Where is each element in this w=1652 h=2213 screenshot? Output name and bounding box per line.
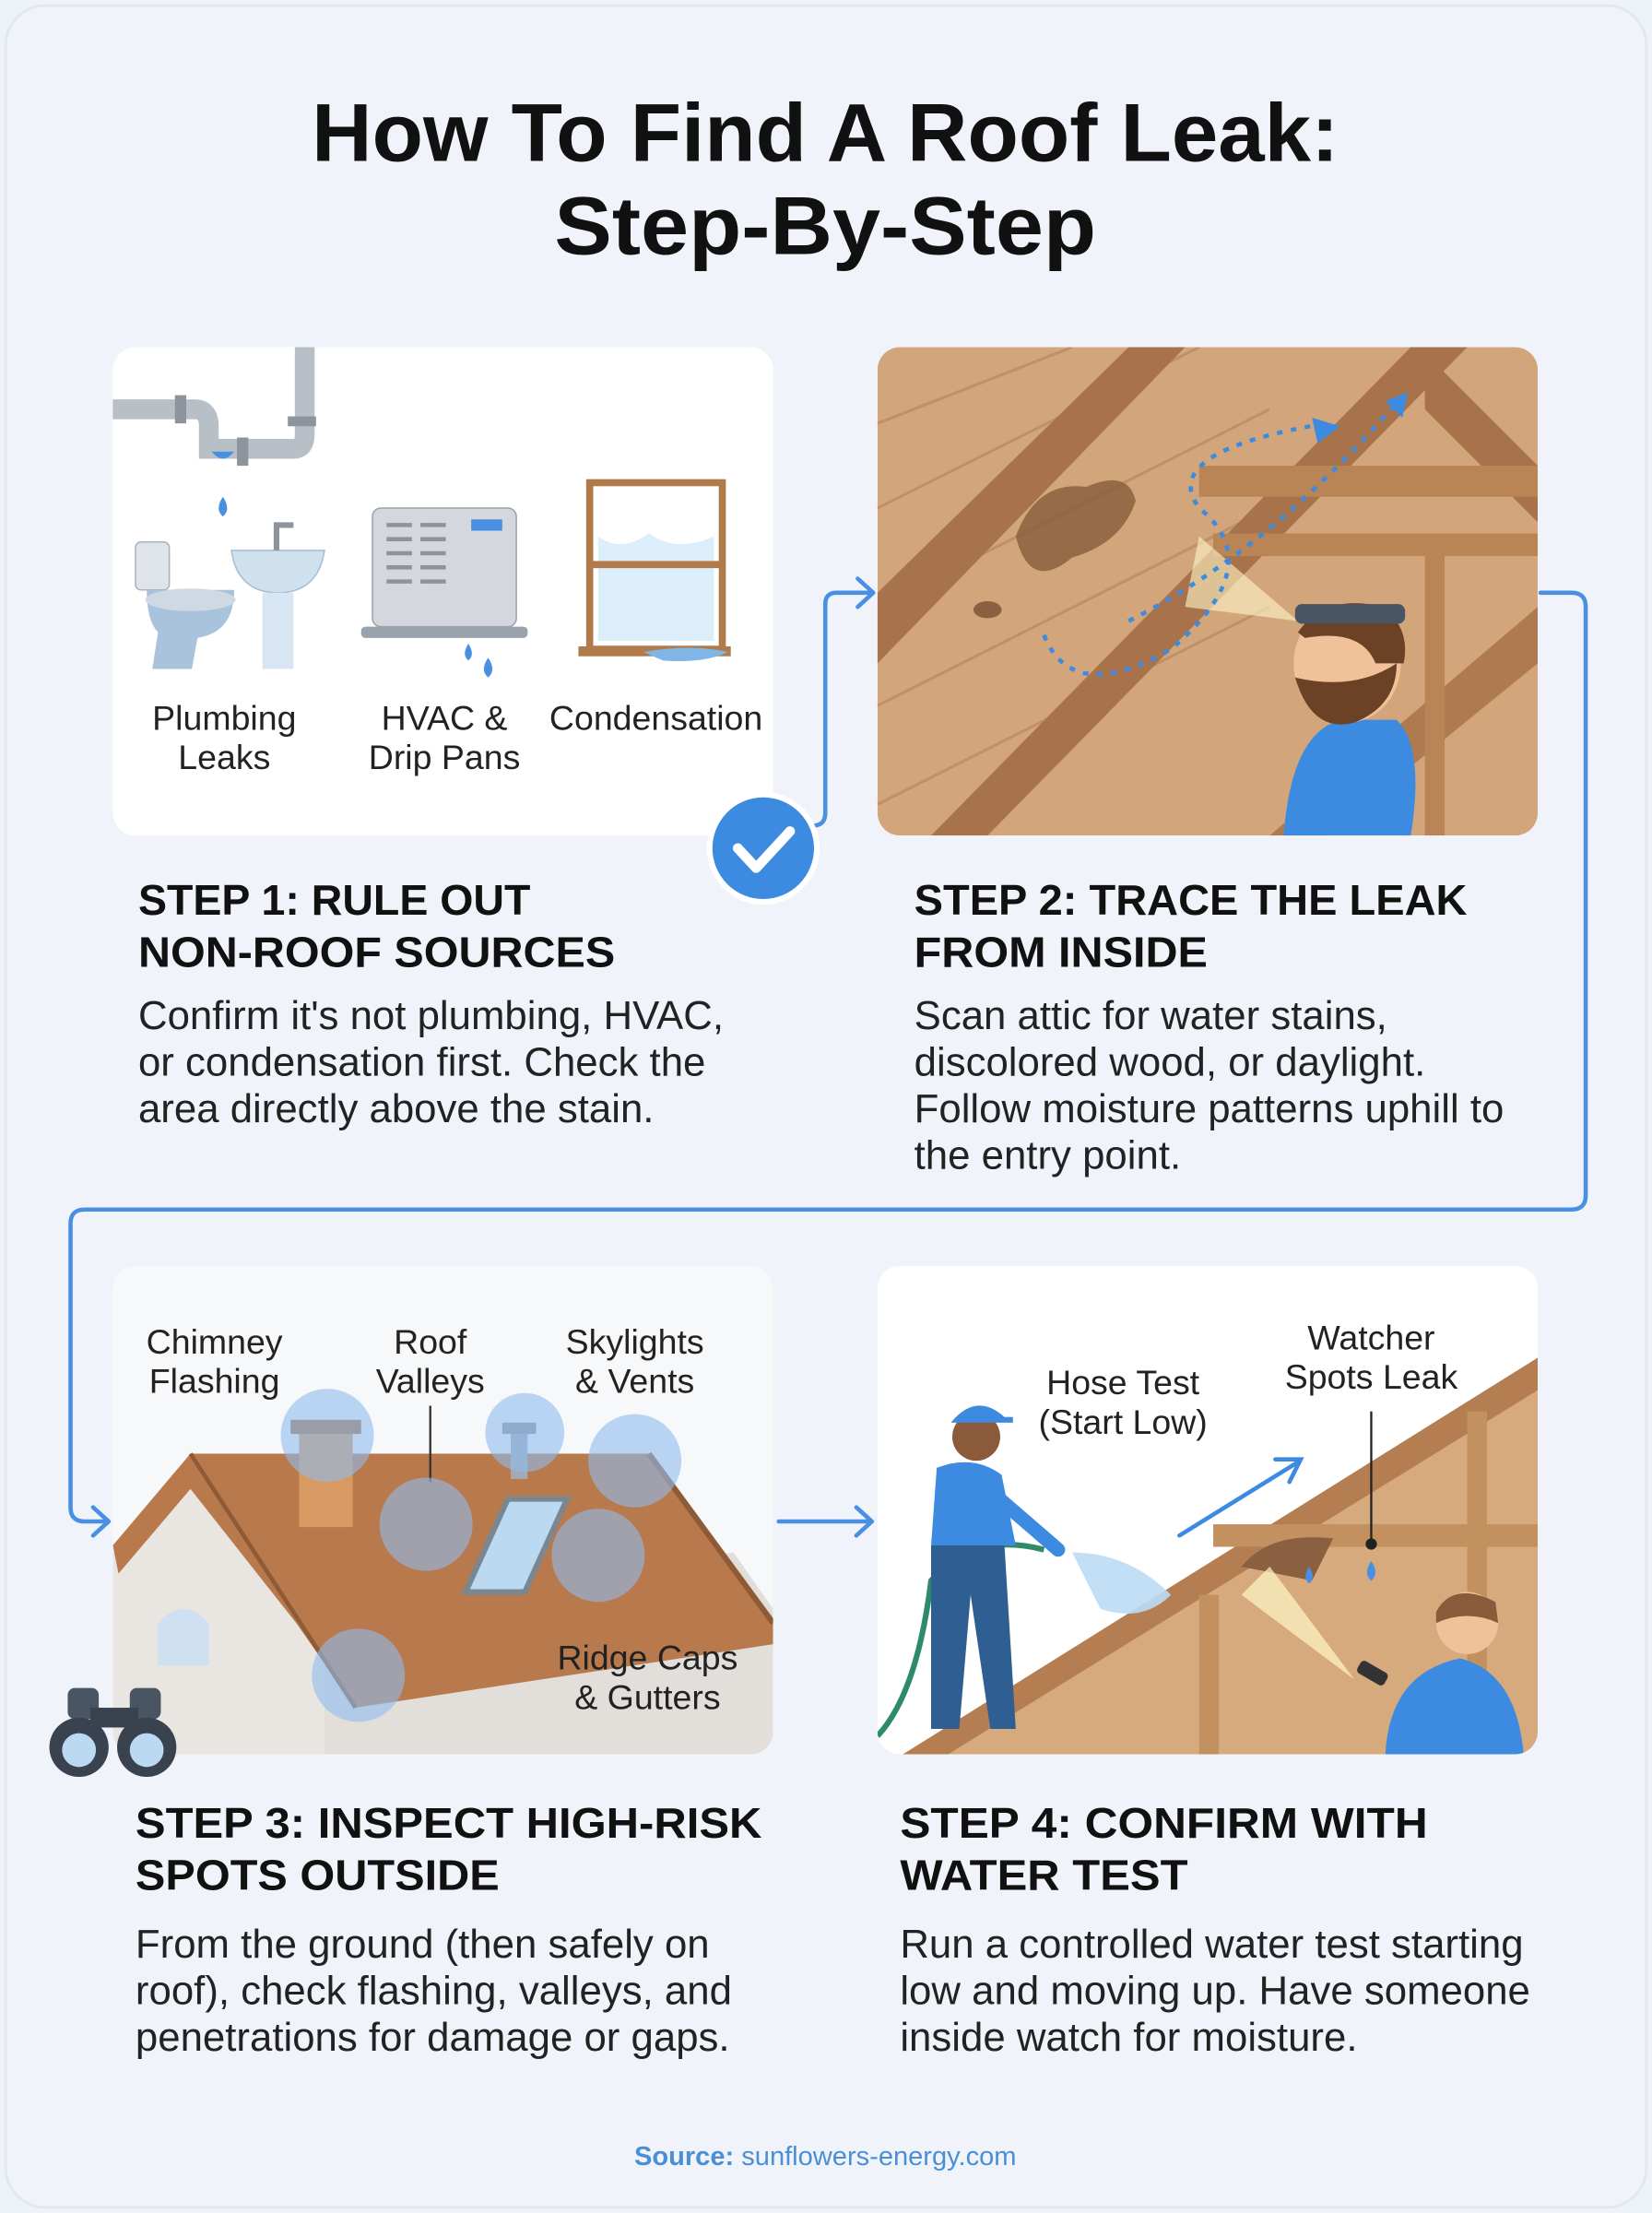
icon: binoculars [50, 1688, 176, 1777]
labels: panel 3: & Gutters [574, 1678, 721, 1717]
title: How To Find A Roof Leak: [312, 87, 1339, 178]
step 2 text: Scan attic for water stains, [914, 993, 1387, 1038]
labels: panel 3: Valleys [376, 1362, 485, 1401]
icon: pipes [112, 348, 316, 516]
step 3 text: roof), check flashing, valleys, and [136, 1968, 732, 2013]
step 3 text: STEP 3: INSPECT HIGH-RISK [136, 1799, 761, 1847]
step 2 text: the entry point. [914, 1132, 1181, 1178]
step 2 text: discolored wood, or daylight. [914, 1039, 1425, 1084]
step 4 text: WATER TEST [900, 1851, 1188, 1899]
step 4 text: STEP 4: CONFIRM WITH [900, 1799, 1428, 1847]
step 3 text: penetrations for damage or gaps. [136, 2015, 730, 2060]
panel 1: non-roof sources [112, 348, 773, 835]
labels: panel 4 [1038, 1318, 1457, 1441]
labels: panel 1: HVAC & [382, 698, 507, 737]
labels: panel 1: Plumbing [152, 698, 296, 737]
panel 2: attic illustration [878, 348, 1538, 835]
worker [931, 1462, 1016, 1545]
step 2 text [914, 876, 1504, 1178]
connector arrows [71, 579, 1586, 1535]
labels: panel 3: Skylights [566, 1322, 704, 1361]
labels: panel 1 [152, 698, 762, 776]
labels: panel 4: (Start Low) [1038, 1402, 1208, 1441]
step 3 text [136, 1799, 761, 2060]
labels: panel 3: & Vents [575, 1362, 694, 1401]
icon: HVAC unit [361, 508, 527, 678]
labels: panel 4: Watcher [1307, 1318, 1435, 1356]
arrow: moving up [1179, 1460, 1301, 1535]
step 1 text: or condensation first. Check the [138, 1039, 705, 1084]
step 3 text: SPOTS OUTSIDE [136, 1851, 500, 1899]
labels: panel 1: Condensation [549, 698, 762, 737]
step 2 text: FROM INSIDE [914, 928, 1208, 976]
labels: panel 3: Roof [394, 1322, 467, 1361]
step 4 text: inside watch for moisture. [900, 2015, 1358, 2060]
labels: panel 4: Hose Test [1046, 1363, 1200, 1402]
icon: window condensation [578, 482, 731, 661]
labels: panel 3: Flashing [149, 1362, 279, 1401]
step 4 text: low and moving up. Have someone [900, 1968, 1530, 2013]
labels: panel 1: Leaks [178, 738, 270, 776]
icon: check badge [710, 795, 817, 902]
panel 3: roof high-risk spots [112, 1329, 773, 1754]
labels: panel 4: Spots Leak [1285, 1357, 1457, 1396]
helper [1386, 1658, 1524, 1755]
labels: panel 3: Chimney [147, 1322, 283, 1361]
panel 4: water test [878, 1266, 1538, 1755]
risk circles [281, 1389, 681, 1722]
labels: panel 3 [147, 1322, 738, 1717]
source: Source: sunflowers-energy.com [634, 2142, 1017, 2172]
step 2 text: STEP 2: TRACE THE LEAK [914, 876, 1468, 924]
title [312, 87, 1339, 272]
title: Step-By-Step [554, 181, 1096, 272]
step 1 text [138, 876, 724, 1131]
step 1 text: STEP 1: RULE OUT [138, 876, 530, 924]
person [1284, 720, 1415, 835]
step 2 text: Follow moisture patterns uphill to [914, 1086, 1504, 1131]
step 4 text: Run a controlled water test starting [900, 1922, 1524, 1967]
step 3 text: From the ground (then safely on [136, 1922, 710, 1967]
labels: panel 3: Ridge Caps [557, 1639, 738, 1677]
step 4 text [900, 1799, 1530, 2060]
labels: panel 1: Drip Pans [369, 738, 520, 776]
step 1 text: NON-ROOF SOURCES [138, 928, 615, 976]
step 1 text: area directly above the stain. [138, 1086, 654, 1131]
step 1 text: Confirm it's not plumbing, HVAC, [138, 993, 724, 1038]
icon: toilet and sink [136, 525, 324, 669]
